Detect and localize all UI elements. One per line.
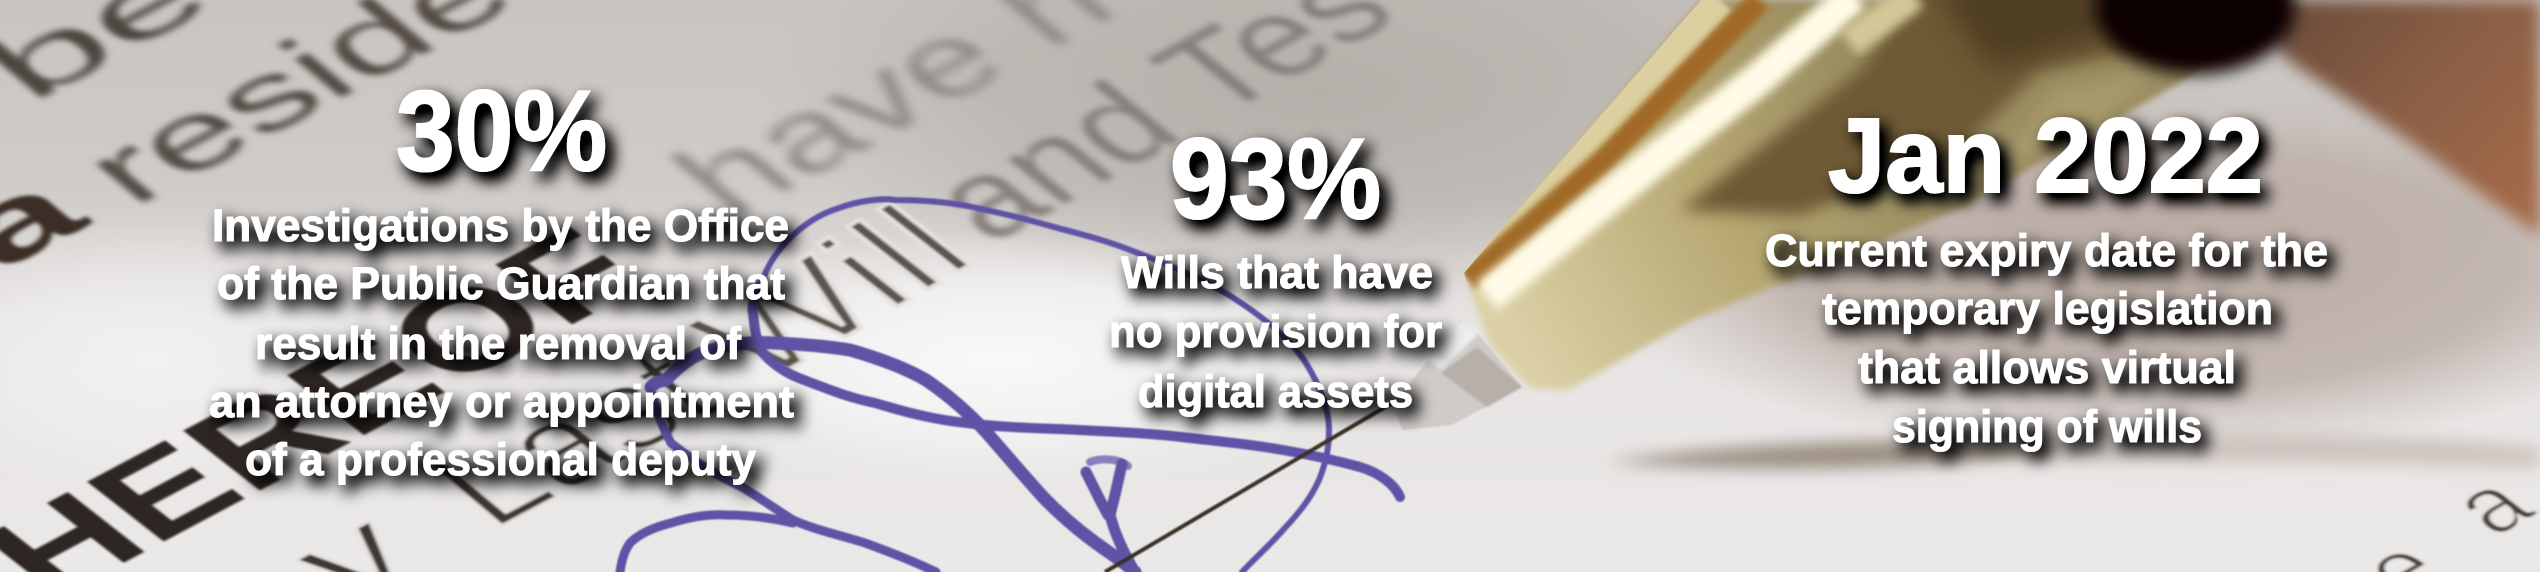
description: wills: no provision for [1109, 306, 1442, 357]
description: wills: Wills that have [1121, 247, 1433, 298]
description: expiry: signing of wills [1892, 401, 2202, 452]
description: investigations [209, 200, 794, 485]
hand [2250, 0, 2540, 236]
signature ink [620, 199, 1400, 572]
stat: 93% [1109, 116, 1442, 417]
figure Jan 2022: Jan 2022 [1828, 97, 2263, 215]
description: investigations: of the Public Guardian that [217, 258, 785, 309]
figure 93%: 93% [1170, 116, 1381, 243]
description: wills: digital assets [1138, 366, 1413, 417]
description: investigations: an attorney or appointment [209, 376, 794, 427]
pen shadow on paper [1605, 435, 2540, 468]
figure 30%: 30% [396, 68, 607, 195]
stat: 30% [209, 68, 794, 485]
description: wills [1109, 247, 1442, 417]
pen line [1105, 403, 1392, 572]
description: investigations: result in the removal of [255, 318, 742, 369]
description: investigations: Investigations by the Office [212, 200, 789, 251]
stat: Jan 2022 [1765, 97, 2328, 452]
description: investigations: of a professional deputy [245, 434, 756, 485]
description: expiry [1765, 225, 2328, 452]
description: expiry: Current expiry date for the [1765, 225, 2328, 276]
description: expiry: temporary legislation [1822, 283, 2273, 334]
printed document text, out of focus: Last [395, 325, 750, 550]
description: expiry: that allows virtual [1858, 342, 2236, 393]
gold pen body [1464, 0, 2295, 390]
pen tip [1392, 320, 1522, 430]
pen cap dark band [2095, 0, 2295, 74]
printed document text, out of focus: Will [660, 182, 1003, 405]
